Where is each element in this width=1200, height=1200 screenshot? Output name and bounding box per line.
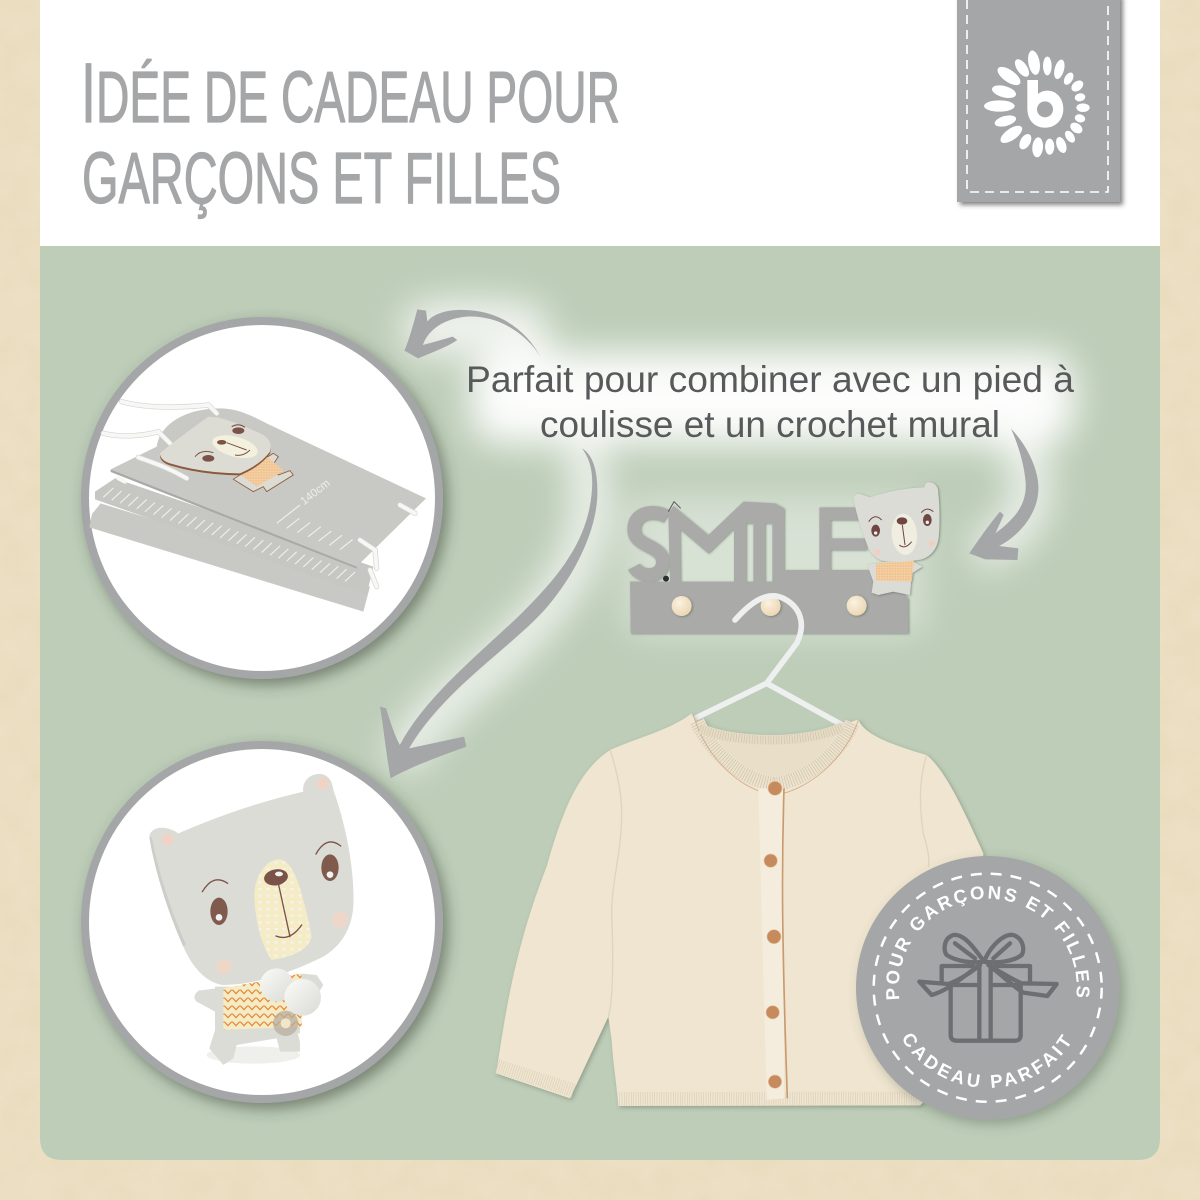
buttons: [764, 781, 782, 1088]
badge text: POUR GARÇONS ET FILLES: [886, 886, 1090, 1000]
icon: gift: [919, 935, 1057, 1041]
white header band: [40, 0, 1160, 246]
arrow: to bear ruler: [380, 448, 597, 778]
ribbed collar: [693, 715, 858, 795]
title: IDÉE DE CADEAU POUR: [81, 46, 620, 140]
hanger: [692, 596, 848, 728]
title: GARÇONS ET FILLES: [82, 139, 561, 219]
wall hook SMILE: [630, 482, 939, 728]
cardigan: [496, 713, 983, 1106]
bear product: [149, 774, 354, 1065]
bear on hook: [853, 482, 939, 595]
button placket: [758, 788, 784, 1100]
callout text: Parfait pour combiner avec un pied à: [466, 359, 1074, 400]
arrow: to wall hook: [969, 429, 1038, 560]
green panel: [40, 246, 1160, 1160]
title: [81, 46, 620, 219]
wooden pegs: [672, 596, 867, 616]
sleeve seams: [608, 750, 929, 1017]
height chart product: [89, 402, 426, 612]
cords: [103, 402, 415, 587]
circle: bear ruler close-up: [85, 745, 439, 1099]
arrow: to height chart: [404, 309, 541, 358]
logo tag: [957, 0, 1120, 202]
white glow behind text and arrows: [400, 300, 1075, 765]
callout text: coulisse et un crochet mural: [540, 404, 1000, 445]
circle: folded height chart: [85, 321, 439, 675]
collar interior: [702, 725, 843, 782]
callout text: [466, 359, 1074, 445]
ribbed hems: [497, 1066, 917, 1099]
icon: flower logo: [984, 50, 1090, 158]
height chart product: 140cm: [298, 477, 333, 508]
small bear: [160, 417, 293, 492]
badge: [854, 855, 1130, 1130]
badge lower text: CADEAU PARFAIT: [904, 1034, 1070, 1088]
